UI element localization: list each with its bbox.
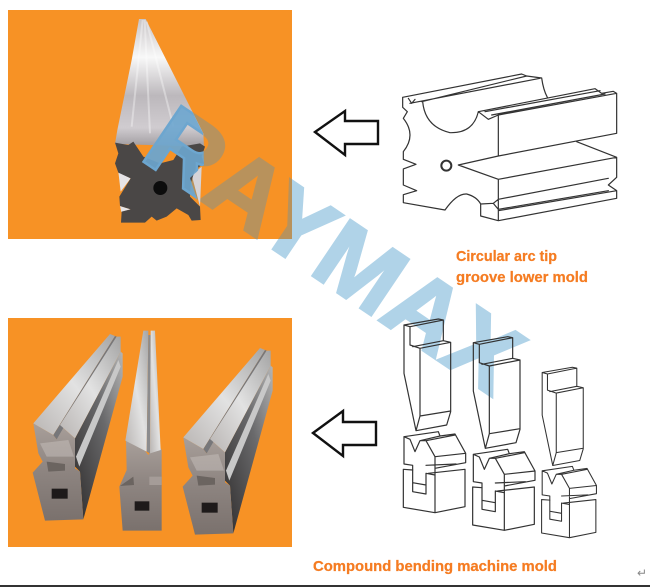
icon: compound mold line drawings	[403, 319, 596, 538]
watermark over orange: RAYMAX	[126, 84, 543, 415]
return glyph: ↵	[637, 566, 647, 580]
caption: compound mold: Compound bending machine mold	[313, 558, 557, 575]
watermark over metal mold: RAYMAX	[126, 84, 543, 415]
caption: groove lower mold: groove lower mold	[456, 269, 588, 286]
panel: circular arc tip photo	[8, 10, 292, 239]
icon: circular arc lower mold line drawing	[403, 74, 617, 221]
bottom rule	[0, 585, 650, 587]
watermark over white: RAYMAX	[126, 84, 543, 415]
arrow: bottom pointing left	[313, 411, 376, 456]
icon: three compound mold photos	[33, 331, 273, 535]
icon: circular arc mold photo	[115, 19, 205, 223]
panel: compound mold photo	[8, 318, 292, 547]
caption: circular arc mold: Circular arc tip	[456, 248, 557, 265]
arrow: top pointing left	[315, 111, 378, 155]
